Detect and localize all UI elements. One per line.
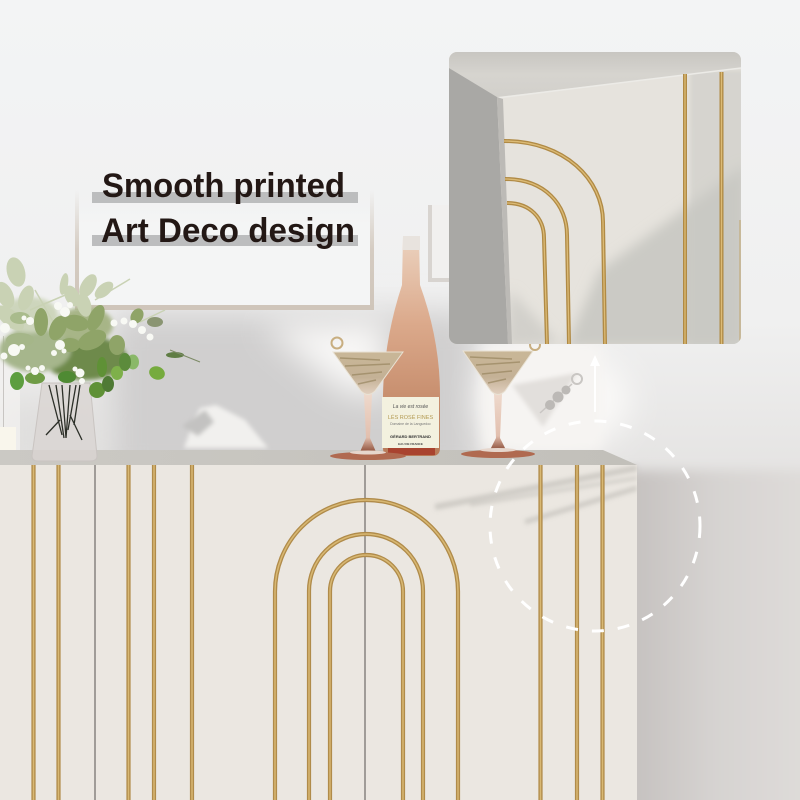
martini glass right xyxy=(461,340,540,458)
heading: Smooth printed xyxy=(102,167,345,205)
martini glass left xyxy=(330,338,406,460)
wine bottle: Domaine de la Languedoc xyxy=(390,422,431,426)
bright green leaves xyxy=(10,350,200,398)
gold vertical lines xyxy=(34,465,602,800)
olive pick shadow on wall xyxy=(512,373,582,427)
mid green leaves xyxy=(6,302,163,355)
white flowers xyxy=(0,302,154,384)
branch shadows on cabinet xyxy=(435,468,637,522)
wine bottle: LÉS ROSÉ FINES xyxy=(388,414,433,421)
plant in vase xyxy=(0,255,200,461)
candle holder xyxy=(0,336,20,458)
heading: Art Deco design xyxy=(101,212,355,250)
pale leaves xyxy=(0,255,165,335)
foliage backdrop xyxy=(0,297,127,380)
ceiling plane xyxy=(449,52,741,97)
sideboard cabinet xyxy=(0,450,637,800)
arrow up xyxy=(590,355,600,412)
callout dashed circle xyxy=(490,421,700,631)
zoom detail panel xyxy=(449,52,745,348)
gold arches xyxy=(275,500,458,800)
heading xyxy=(92,167,358,250)
wall art frame xyxy=(75,190,450,310)
wine bottle: GÉRARD BERTRAND xyxy=(390,434,431,439)
wine bottle: EAU DE FRANCE xyxy=(398,442,423,446)
wine bottle xyxy=(382,236,440,456)
zoom gold lines xyxy=(504,72,740,344)
left side plane xyxy=(449,68,508,344)
vase xyxy=(32,383,97,461)
wine bottle: La vie est rosée xyxy=(393,404,428,410)
shadow band xyxy=(566,175,741,344)
